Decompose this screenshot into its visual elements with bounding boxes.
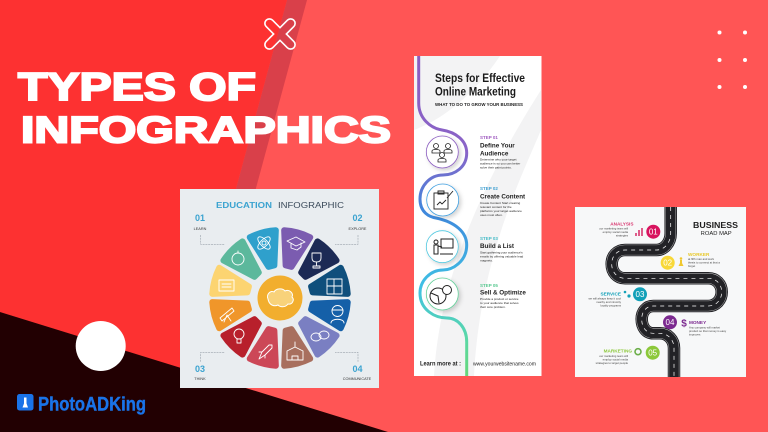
heading: steps (435, 73, 525, 98)
step 2 icon: clipboard (427, 184, 459, 216)
marker 04 money: improves (689, 332, 701, 336)
title (18, 66, 391, 150)
panel: business road map (575, 207, 746, 377)
heading: business road map: ROAD MAP (701, 231, 732, 237)
background: bright red area (0, 0, 287, 370)
step 1 icon: people (426, 136, 458, 168)
label: 02 explore: EXPLORE (349, 227, 367, 231)
marker 05 marketing: strategies to target people (596, 361, 628, 365)
marker 01 analysis (599, 222, 660, 239)
logo: PhotoADKing: PhotoADKing (38, 394, 146, 416)
step 3 text: Build a List (480, 243, 515, 250)
center circle: brain (258, 276, 302, 320)
step 4 text: Sell & Optimize (480, 290, 526, 296)
step 1 text (480, 135, 520, 170)
step 1 text: STEP 01 (480, 135, 498, 140)
marker 04 money: Any company will market (689, 326, 720, 330)
label: 03 think (194, 364, 206, 381)
title: TYPES OF (18, 66, 256, 109)
footer: learn more: Learn more at : (420, 362, 461, 368)
label: 01 learn: 01 (195, 213, 205, 223)
step 3 icon: presenter (426, 231, 458, 263)
step 1 text: Audience (480, 150, 509, 158)
marker 02 worker: at fifth man and work (688, 257, 715, 261)
marker 04 money: $ (681, 318, 687, 330)
marker 05 marketing: 05 (648, 348, 658, 358)
marker 03 service: loyalty programs (600, 304, 622, 308)
step 2 text: platforms your target audience (480, 209, 522, 213)
step 2 text (480, 186, 526, 217)
step 2 text: uses most often. (480, 213, 503, 217)
step 1 text: Determine who your target (480, 158, 517, 162)
marker 01 analysis: strategies (616, 234, 629, 238)
heading: education infographic: INFOGRAPHIC (278, 200, 344, 210)
label: 02 explore (349, 213, 367, 231)
marker 03 service: we will always keep it cool (588, 296, 621, 300)
step 3 text: magnets. (480, 258, 493, 262)
background: black corner (0, 312, 388, 432)
marker 04 money: MONEY (689, 320, 707, 325)
marker 05 marketing: our marketing team will (599, 354, 628, 358)
decorative white circle (76, 321, 126, 371)
step 2 text: relevant content for the (480, 205, 512, 209)
step 4 text: Provide a product or service (480, 297, 519, 301)
marker 02 worker: thesis to connect at that a (688, 260, 720, 264)
step 2 text: STEP 02 (480, 186, 498, 191)
label: 04 communicate: 04 (352, 364, 363, 374)
panel: steps for effective online marketing (414, 56, 542, 376)
marker 02 worker: forget (688, 264, 695, 268)
marker 03 service: SERVICE (600, 292, 621, 296)
label: 02 explore: 02 (352, 213, 363, 223)
marker 01 analysis: 01 (649, 228, 658, 236)
step 3 text (480, 236, 524, 262)
marker 04 money: product so that money is easy (689, 329, 727, 333)
chart: wheel of twelve segments (211, 229, 349, 367)
label: 01 learn (194, 213, 207, 231)
marker 03 service: 03 (636, 290, 645, 299)
footer: learn more: www.yourwebsitename.com (473, 362, 537, 368)
timeline curve (419, 56, 467, 376)
footer: learn more (420, 362, 537, 368)
icon: rounded x (252, 6, 308, 62)
step 3 text: STEP 03 (480, 236, 498, 241)
step 1 text: Define Your (480, 142, 515, 150)
step 4 text: to your audience that solves (480, 301, 519, 305)
marker 02 worker: WORKER (688, 252, 710, 257)
title: INFOGRAPHICS (21, 110, 391, 150)
heading: education infographic (216, 200, 344, 210)
step 3 text: emails by offering valuable lead (480, 254, 524, 258)
step 1 text: solve their paint points. (480, 166, 512, 170)
step 2 text: Create Content (480, 194, 526, 200)
heading: steps: Online Marketing (435, 86, 516, 98)
step 3 text: Start gathering your audience's (480, 250, 523, 254)
label: 03 think: 03 (195, 364, 205, 374)
icons: wheel segment line icons (219, 235, 344, 360)
subheading: WHAT TO DO TO GROW YOUR BUSINESS (435, 102, 523, 107)
road (612, 207, 722, 377)
label: 03 think: THINK (194, 377, 206, 381)
marker 04 money (663, 315, 727, 336)
step 4 text: their core problem. (480, 305, 506, 309)
step 4 text: STEP 05 (480, 283, 498, 288)
marker 02 worker (661, 252, 720, 270)
heading: business road map: BUSINESS (693, 220, 738, 230)
step 2 text: Create Content Start creating (480, 201, 521, 205)
icon: dot grid (718, 30, 747, 89)
marker 02 worker: 02 (663, 258, 673, 268)
heading: business road map (693, 220, 738, 237)
marker 05 marketing (596, 346, 660, 365)
background: darker diagonal band (187, 0, 307, 376)
marker 03 service: nearby and minority (596, 300, 622, 304)
heading: steps: Steps for Effective (435, 73, 525, 85)
marker 04 money: 04 (666, 318, 675, 327)
step 1 text: audience is so you can better (480, 162, 520, 166)
label: 04 communicate (343, 364, 372, 381)
marker 03 service (588, 287, 647, 308)
label: 01 learn: LEARN (194, 227, 207, 231)
marker 01 analysis: our marketing team will (599, 226, 628, 230)
heading: education infographic: EDUCATION (216, 200, 272, 210)
panel: education infographic (180, 189, 379, 388)
label: 04 communicate: COMMUNICATE (343, 377, 372, 381)
marker 01 analysis: employ social media (603, 230, 628, 234)
marker 01 analysis: ANALYSIS (610, 222, 634, 226)
marker 05 marketing: MARKETING (604, 348, 632, 354)
marker 05 marketing: employ social media (603, 358, 628, 362)
step 4 text (480, 283, 526, 309)
step 4 icon: chart and magnifier (426, 278, 458, 310)
